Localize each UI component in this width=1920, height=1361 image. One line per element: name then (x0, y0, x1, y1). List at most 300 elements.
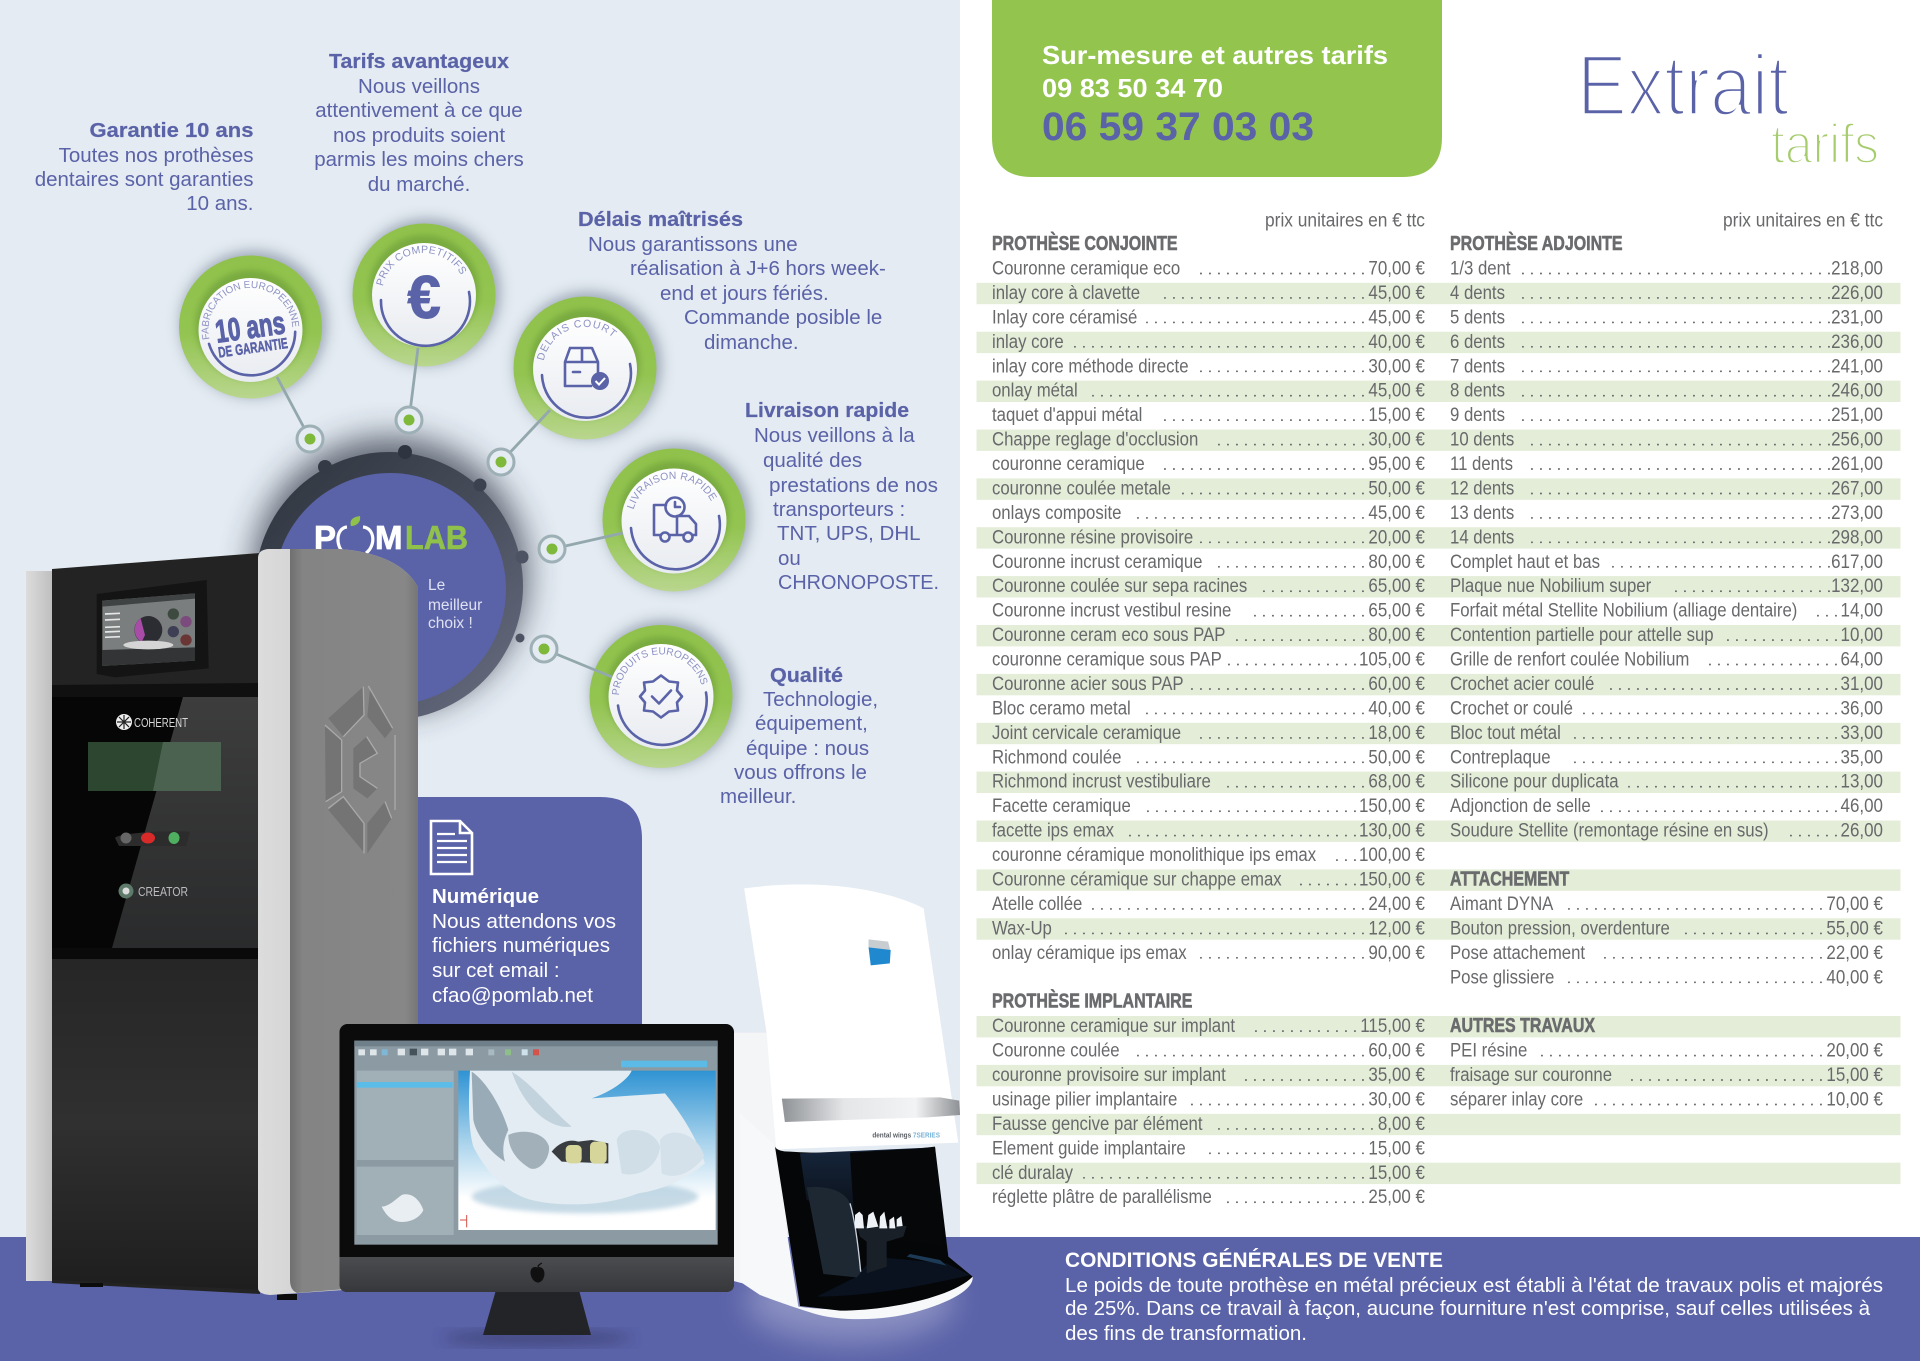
connector: garantie (277, 377, 323, 452)
row: 70,00 € (1826, 892, 1883, 914)
row: Couronne ceramique eco (992, 257, 1180, 279)
text: tarifs avantageux: attentivement à ce que (315, 99, 523, 122)
creator mark: CREATOR (138, 884, 188, 899)
scanner arm (807, 1187, 862, 1277)
row: couronne céramique monolithique ips emax (992, 844, 1316, 865)
row (1450, 941, 1883, 963)
row: 1/3 dent (1450, 257, 1511, 279)
row (992, 1112, 1425, 1134)
row (992, 623, 1425, 645)
phone box: 06 59 37 03 03 (1042, 105, 1314, 149)
row: 20,00 € (1368, 525, 1425, 548)
row (1450, 794, 1883, 816)
badge: livraison rapide (596, 436, 758, 598)
icon: parcel (565, 348, 609, 390)
row: Facette ceramique (992, 795, 1131, 816)
row: 273,00 (1831, 501, 1883, 523)
row: 60,00 € (1368, 672, 1425, 694)
row: onlays composite (992, 502, 1121, 523)
price table: attachement (1450, 867, 1883, 988)
scanner status logo (869, 939, 891, 965)
title: tarifs: tarifs (1771, 112, 1879, 175)
row: Pose attachement (1450, 942, 1585, 963)
text: livraison rapide: TNT, UPS, DHL (777, 522, 921, 545)
text: tarifs avantageux: parmis les moins chers (314, 148, 524, 171)
row (1450, 770, 1883, 792)
phone box: Sur-mesure et autres tarifs (1042, 40, 1388, 70)
row: 100,00 € (1359, 843, 1425, 865)
slogan: choix ! (428, 615, 473, 632)
price table: autres travaux (1450, 1013, 1883, 1110)
row: 65,00 € (1368, 599, 1425, 621)
row: Wax-Up (992, 917, 1052, 939)
slogan: Le (428, 577, 445, 594)
row: 55,00 € (1826, 916, 1883, 939)
row: Couronne incrust ceramique (992, 551, 1203, 572)
text: livraison rapide: Livraison rapide (745, 399, 909, 422)
row: 13 dents (1450, 502, 1514, 523)
text: tarifs avantageux (314, 50, 524, 196)
left page background (0, 0, 960, 1240)
row (1450, 696, 1883, 719)
text: livraison rapide (745, 399, 939, 594)
row: couronne coulée metale (992, 477, 1171, 499)
row (992, 770, 1425, 792)
row (1450, 1087, 1883, 1110)
row: 40,00 € (1826, 965, 1883, 988)
price table: prothèse conjointe (992, 209, 1425, 963)
row (1450, 476, 1883, 499)
row: Fausse gencive par élément (992, 1113, 1203, 1134)
printer tower (258, 549, 418, 1295)
text: garantie 10 ans: dentaires sont garanties (35, 168, 254, 191)
badge: livraison rapide: LIVRAISON RAPIDE (627, 472, 717, 509)
scanner rotary plate (857, 1226, 907, 1273)
row (1450, 647, 1883, 670)
unit note: prix unitaires en € ttc (1723, 209, 1883, 231)
row: 60,00 € (1368, 1038, 1425, 1061)
row: 6 dents (1450, 331, 1505, 352)
row (1450, 916, 1883, 939)
central logo disc (252, 436, 528, 720)
row (992, 696, 1425, 719)
row (1450, 452, 1883, 474)
row (1450, 672, 1883, 694)
row: 90,00 € (1368, 941, 1425, 963)
dental model render (472, 1180, 698, 1213)
badge: prix compétitifs: € (407, 264, 441, 331)
text: qualité (720, 664, 878, 808)
row: 9 dents (1450, 404, 1505, 425)
text: numérique: Numérique (432, 885, 539, 908)
row: inlay core méthode directe (992, 355, 1189, 377)
row: Element guide implantaire (992, 1137, 1186, 1159)
conditions générales de vente (1065, 1249, 1883, 1345)
title: Extrait: Extrait (1577, 38, 1789, 134)
row: 80,00 € (1368, 623, 1425, 645)
row: Couronne coulée (992, 1039, 1120, 1061)
row: 25,00 € (1368, 1185, 1425, 1207)
row: 31,00 (1841, 672, 1883, 694)
row: Inlay core céramisé (992, 306, 1137, 328)
row: 22,00 € (1826, 941, 1883, 963)
conditions générales de vente: de 25%. Dans ce travail à façon, aucune fourniture n'est comprise, sauf celles utilisées à (1065, 1298, 1871, 1320)
text: tarifs avantageux: nos produits soient (333, 124, 505, 147)
row: 14,00 (1841, 599, 1883, 621)
phone box (992, 0, 1442, 177)
conditions générales de vente: Le poids de toute prothèse en métal précieux est établi à l'état de travaux polis et majorés (1065, 1275, 1883, 1297)
connector: tarifs (396, 348, 422, 433)
row: 15,00 € (1368, 1161, 1425, 1183)
creator mark (118, 884, 188, 899)
row (1450, 574, 1883, 596)
row: clé duralay (992, 1162, 1074, 1183)
text: livraison rapide: qualité des (763, 449, 862, 472)
row: 218,00 (1831, 256, 1883, 279)
row (1450, 379, 1883, 401)
row (992, 1038, 1425, 1061)
row: 45,00 € (1368, 379, 1425, 401)
row: Pose glissiere (1450, 966, 1554, 988)
row (1450, 1063, 1883, 1085)
row (1450, 403, 1883, 425)
apple mark (531, 1263, 544, 1282)
row: 241,00 (1831, 354, 1883, 377)
row: 45,00 € (1368, 305, 1425, 328)
row (992, 281, 1425, 303)
row: 15,00 € (1826, 1063, 1883, 1085)
heading: AUTRES TRAVAUX (1450, 1013, 1596, 1037)
row: 15,00 € (1368, 403, 1425, 425)
scanner glow (745, 1258, 955, 1342)
row: Couronne incrust vestibul resine (992, 600, 1231, 621)
row: 45,00 € (1368, 501, 1425, 523)
row: inlay core (992, 331, 1064, 352)
text: tarifs avantageux: Tarifs avantageux (329, 50, 510, 73)
row: 20,00 € (1826, 1038, 1883, 1061)
badge: produits européens (583, 612, 745, 774)
heading: PROTHÈSE CONJOINTE (992, 231, 1178, 254)
row (992, 1185, 1425, 1207)
row: réglette plâtre de parallélisme (992, 1186, 1212, 1207)
row: Forfait métal Stellite Nobilium (alliage dentaire) (1450, 600, 1797, 621)
row: Silicone pour duplicata (1450, 771, 1619, 792)
text: numérique (432, 885, 616, 1007)
conditions générales de vente: CONDITIONS GÉNÉRALES DE VENTE (1065, 1249, 1443, 1272)
row: onlay métal (992, 380, 1078, 401)
icon: document (431, 821, 472, 874)
row: 267,00 (1831, 476, 1883, 499)
badge: délais court: DELAIS COURT (536, 320, 618, 360)
row: 132,00 (1831, 574, 1883, 596)
row (1450, 965, 1883, 988)
row (992, 892, 1425, 914)
slogan: meilleur (428, 597, 482, 614)
row: couronne ceramique sous PAP (992, 648, 1222, 670)
row: 36,00 (1841, 696, 1883, 719)
connector: qualité (531, 636, 612, 677)
row: 261,00 (1831, 452, 1883, 474)
icon: quality seal (640, 676, 682, 718)
text: garantie 10 ans: 10 ans. (186, 192, 254, 215)
row: 12,00 € (1368, 916, 1425, 939)
printer touch screen (97, 580, 209, 677)
row (1450, 501, 1883, 523)
row: 115,00 € (1360, 1014, 1425, 1036)
row: 26,00 (1841, 818, 1883, 841)
row: 35,00 (1841, 745, 1883, 768)
row: Atelle collée (992, 893, 1082, 914)
row: 50,00 € (1368, 476, 1425, 499)
row: Grille de renfort coulée Nobilium (1450, 648, 1689, 670)
scanner handle (782, 1097, 960, 1122)
row: Bloc tout métal (1450, 722, 1561, 743)
row (992, 1063, 1425, 1085)
row: Couronne ceramique sur implant (992, 1015, 1235, 1036)
row (992, 452, 1425, 474)
row (992, 1014, 1425, 1036)
badge: 10 ans de garantie: 10 ans (213, 304, 287, 350)
text: numérique: Nous attendons vos (432, 910, 616, 933)
text: qualité: équipement, (755, 712, 868, 735)
row (992, 721, 1425, 743)
row: PEI résine (1450, 1039, 1527, 1061)
row (992, 330, 1425, 352)
software toolbar icons (358, 1049, 539, 1055)
row: 24,00 € (1368, 892, 1425, 914)
row (1450, 1038, 1883, 1061)
text: tarifs avantageux: du marché. (368, 173, 470, 196)
row: Joint cervicale ceramique (992, 722, 1181, 743)
row: 4 dents (1450, 282, 1505, 303)
row: Couronne acier sous PAP (992, 673, 1184, 694)
price table: prothèse implantaire (992, 989, 1425, 1207)
coherent mark (116, 714, 188, 730)
badge: délais court (507, 284, 669, 446)
scanner upper body (730, 884, 960, 1293)
logo wordmark (314, 516, 468, 556)
monitor screen software (354, 1041, 718, 1245)
row: Couronne céramique sur chappe emax (992, 868, 1282, 890)
text: garantie 10 ans (35, 119, 254, 215)
row: inlay core à clavette (992, 282, 1140, 303)
row (1450, 721, 1883, 743)
row: 130,00 € (1359, 818, 1425, 841)
scanner lower cavity (740, 1113, 973, 1319)
row: 10 dents (1450, 428, 1514, 450)
row: 251,00 (1831, 403, 1883, 425)
phone box: 09 83 50 34 70 (1042, 73, 1223, 103)
text: garantie 10 ans: Garantie 10 ans (90, 119, 254, 142)
row: 30,00 € (1368, 1087, 1425, 1110)
text: numérique: cfao@pomlab.net (432, 984, 593, 1007)
text: numérique: fichiers numériques (432, 934, 610, 957)
row: 13,00 (1841, 770, 1883, 792)
row: 236,00 (1831, 330, 1883, 352)
row: 35,00 € (1368, 1063, 1425, 1085)
panel: numérique (400, 797, 642, 1040)
tower hexagon emblem (325, 686, 395, 853)
row (992, 501, 1425, 523)
row (992, 818, 1425, 841)
row: onlay céramique ips emax (992, 942, 1187, 963)
row (992, 941, 1425, 963)
row (992, 1136, 1425, 1159)
row (992, 867, 1425, 890)
printer glass front (52, 697, 260, 948)
row: Aimant DYNA (1450, 893, 1554, 914)
row (992, 574, 1425, 596)
row: Couronne coulée sur sepa racines (992, 575, 1247, 596)
row: 80,00 € (1368, 550, 1425, 572)
icon: delivery truck (654, 498, 696, 542)
row: 68,00 € (1368, 770, 1425, 792)
row: Contreplaque (1450, 746, 1551, 768)
text: tarifs avantageux: Nous veillons (358, 75, 480, 98)
heading: PROTHÈSE IMPLANTAIRE (992, 989, 1192, 1012)
axis gizmo (460, 1215, 467, 1227)
row: 45,00 € (1368, 281, 1425, 303)
row: Couronne ceram eco sous PAP (992, 624, 1225, 645)
row: 50,00 € (1368, 745, 1425, 768)
row (1450, 745, 1883, 768)
row: 15,00 € (1368, 1136, 1425, 1159)
text: garantie 10 ans: Toutes nos prothèses (59, 144, 254, 167)
row (1450, 623, 1883, 645)
row: Richmond coulée (992, 746, 1121, 768)
row: Adjonction de selle (1450, 795, 1591, 816)
text: qualité: équipe : nous (746, 737, 869, 760)
row: 150,00 € (1359, 867, 1425, 890)
row (992, 1087, 1425, 1110)
row (1450, 256, 1883, 279)
row: taquet d'appui métal (992, 404, 1142, 425)
row: Bloc ceramo metal (992, 697, 1131, 719)
row: 64,00 (1841, 647, 1883, 670)
text: délais maîtrisés: Commande posible le (684, 306, 882, 329)
row (992, 599, 1425, 621)
row: 105,00 € (1359, 647, 1425, 670)
text: numérique: sur cet email : (432, 959, 560, 982)
row: 8 dents (1450, 380, 1505, 401)
row: 65,00 € (1368, 574, 1425, 596)
dental models in scanner (855, 1212, 903, 1228)
text: livraison rapide: ou (778, 547, 801, 570)
row (992, 305, 1425, 328)
row: 95,00 € (1368, 452, 1425, 474)
row: couronne ceramique (992, 453, 1145, 474)
row: Soudure Stellite (remontage résine en sus) (1450, 819, 1769, 841)
text: qualité: Qualité (770, 664, 843, 687)
row: Chappe reglage d'occlusion (992, 428, 1198, 450)
row: Bouton pression, overdenture (1450, 917, 1670, 939)
row: 5 dents (1450, 306, 1505, 328)
row (1450, 892, 1883, 914)
row: Plaque nue Nobilium super (1450, 575, 1651, 596)
row: Richmond incrust vestibuliare (992, 771, 1211, 792)
row (992, 354, 1425, 377)
monitor (340, 1024, 734, 1335)
text: délais maîtrisés: dimanche. (704, 331, 799, 354)
connector: délais (488, 410, 550, 475)
coherent mark: COHERENT (134, 715, 188, 730)
connector: livraison (539, 533, 623, 562)
row (992, 525, 1425, 548)
row: 70,00 € (1368, 256, 1425, 279)
text: qualité: vous offrons le (734, 761, 867, 784)
row (992, 427, 1425, 450)
row: facette ips emax (992, 819, 1114, 841)
row (1450, 330, 1883, 352)
row: 40,00 € (1368, 330, 1425, 352)
badge: prix compétitifs (346, 211, 508, 373)
row (992, 550, 1425, 572)
row (992, 403, 1425, 425)
row: usinage pilier implantaire (992, 1088, 1177, 1110)
row: 298,00 (1831, 525, 1883, 548)
text: livraison rapide: CHRONOPOSTE. (778, 571, 939, 594)
row: 12 dents (1450, 477, 1514, 499)
text: livraison rapide: transporteurs : (773, 498, 905, 521)
row: 226,00 (1831, 281, 1883, 303)
badge: produits européens: PRODUITS EUROPEENS (612, 647, 708, 695)
row: 30,00 € (1368, 427, 1425, 450)
row: séparer inlay core (1450, 1088, 1583, 1110)
row (992, 745, 1425, 768)
row (992, 916, 1425, 939)
row: Contention partielle pour attelle sup (1450, 624, 1714, 645)
row: fraisage sur couronne (1450, 1064, 1612, 1085)
row (1450, 354, 1883, 377)
row: 8,00 € (1378, 1112, 1425, 1134)
badge: 10 ans de garantie (172, 243, 334, 405)
row: Couronne résine provisoire (992, 526, 1193, 548)
row: Crochet acier coulé (1450, 673, 1594, 694)
row: 10,00 (1841, 623, 1883, 645)
row: 246,00 (1831, 379, 1883, 401)
text: qualité: meilleur. (720, 785, 796, 808)
conditions générales de vente: des fins de transformation. (1065, 1323, 1307, 1345)
row: 46,00 (1841, 794, 1883, 816)
logo wordmark: LAB (405, 519, 468, 556)
text: délais maîtrisés: Délais maîtrisés (578, 208, 743, 231)
logo wordmark: M (375, 519, 402, 556)
row (992, 794, 1425, 816)
row (992, 1161, 1425, 1183)
row: 14 dents (1450, 526, 1514, 548)
heading: PROTHÈSE ADJOINTE (1450, 231, 1623, 254)
badge: prix compétitifs: PRIX COMPETITIFS (376, 246, 466, 286)
row: 231,00 (1831, 305, 1883, 328)
price table stripes (976, 283, 1900, 1184)
unit note: prix unitaires en € ttc (1265, 209, 1425, 231)
row: couronne provisoire sur implant (992, 1064, 1226, 1085)
row (992, 672, 1425, 694)
row: Crochet or coulé (1450, 697, 1573, 719)
heading: ATTACHEMENT (1450, 867, 1570, 890)
row (992, 476, 1425, 499)
text: délais maîtrisés (578, 208, 886, 354)
row: 150,00 € (1359, 794, 1425, 816)
row: 18,00 € (1368, 721, 1425, 743)
row: 10,00 € (1826, 1087, 1883, 1110)
row: 40,00 € (1368, 696, 1425, 719)
row (1450, 427, 1883, 450)
row (1450, 550, 1883, 572)
text: livraison rapide: prestations de nos (769, 474, 938, 497)
row (992, 379, 1425, 401)
row: Complet haut et bas (1450, 551, 1600, 572)
